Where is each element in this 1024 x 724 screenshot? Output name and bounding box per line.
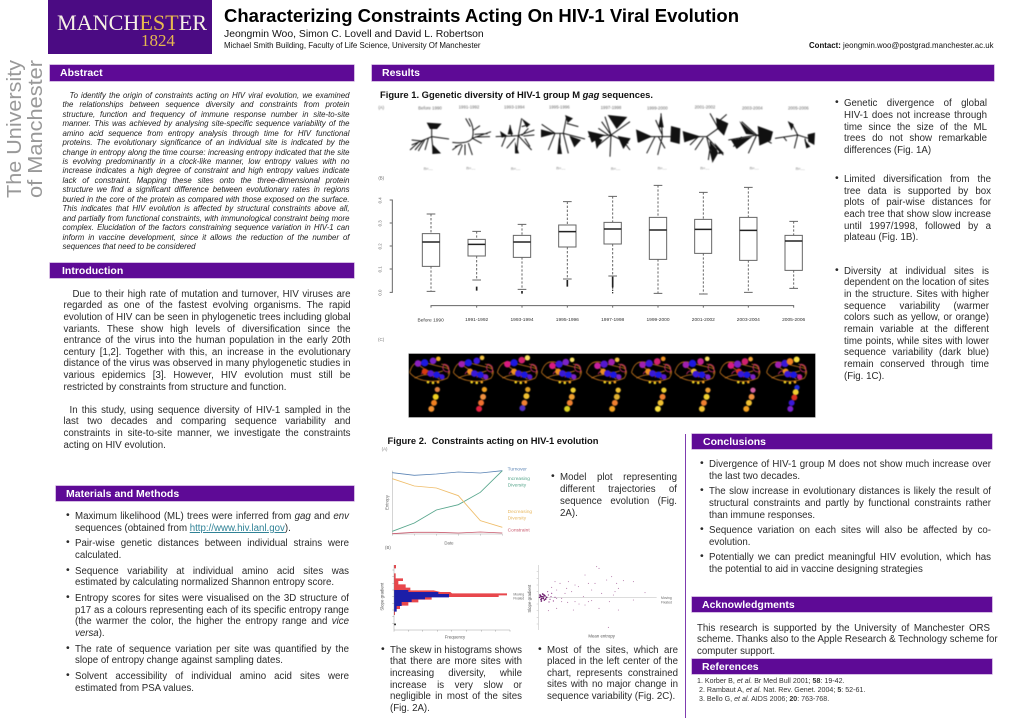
- figure 2B bullet: histograms: [381, 643, 522, 714]
- scatter plot: [527, 565, 672, 638]
- abstract text: change in entropy along the time course: increasing entropy indicated that the site: [62, 148, 350, 156]
- side wordmark: The University of Manchester: [4, 60, 44, 198]
- figure 1B: box plots of pair-wise distances: 1997-1998: [601, 317, 625, 323]
- tree 1: [410, 123, 449, 154]
- figure 1A: phylogenetic trees by period: 2003-2004: [742, 105, 763, 110]
- text: •: [700, 523, 704, 535]
- figure 1A: phylogenetic trees by period: n=…: [511, 166, 520, 171]
- acknowledgments text: This research is supported by the University of Manchester ORS: [697, 622, 990, 634]
- heading: References: [692, 659, 992, 674]
- heading: Abstract: Abstract: [60, 67, 103, 79]
- figure 2A: model plot of entropy trajectories: Turnover: [508, 466, 527, 472]
- tree 7: [683, 113, 728, 163]
- abstract text: manner. This was achieved by analysing site-specific sequence variability of the: [62, 119, 350, 128]
- abstract text: proteins. The evolutionary significance of an individual site is indicated by the: [62, 138, 350, 147]
- figure 1 bullets: Diversity at individual sites is: [844, 266, 989, 277]
- materials and methods bullets: Solvent accessibility of individual amino acid sites were: [75, 671, 349, 682]
- materials and methods bullets: p17 as a colours representing each of its specific entropy range: [75, 605, 349, 616]
- figure 1A: phylogenetic trees by period: n=…: [424, 166, 433, 171]
- figure 2A bullet: [551, 470, 677, 519]
- materials and methods bullets: Entropy scores for sites were visualised on the 3D structure of: [75, 593, 349, 604]
- structure 8: [720, 357, 760, 412]
- introduction text: restricted by constraints from structure and function.: [64, 382, 286, 393]
- materials and methods bullets: estimated by calculating normalized Shannon entropy score.: [75, 577, 334, 588]
- scatter plot: Moving: [661, 596, 672, 600]
- figure 1A: phylogenetic trees by period: n=…: [466, 165, 476, 170]
- figure 1B: box plots of pair-wise distances: (B): [378, 175, 385, 180]
- figure 1A: phylogenetic trees by period: n=…: [556, 165, 566, 170]
- structure 4: [541, 357, 581, 412]
- abstract text: [62, 91, 350, 251]
- figure 1A: phylogenetic trees by period: n=…: [796, 166, 805, 171]
- text: •: [66, 536, 70, 548]
- figure 1 bullets: remain conserved through time: [844, 359, 989, 370]
- line: constraint: [392, 532, 502, 534]
- structure 9: [767, 356, 807, 412]
- figure 1B: box plots of pair-wise distances: 0.1: [378, 266, 383, 272]
- figure 1 bullets: until 1997/1998, followed by a: [844, 221, 991, 232]
- introduction text: entrance of the virus into the human population in the early 20th: [64, 335, 350, 346]
- figure 1A: phylogenetic trees by period: n=…: [700, 166, 710, 171]
- logo: University of Manchester 1824: 1824: [141, 31, 176, 50]
- figure 1A: phylogenetic trees by period: (A): [378, 105, 385, 110]
- abstract text: increase indicates a high degree of constraint and high entropy values indicate: [62, 166, 350, 175]
- acknowledgments text: computer support.: [697, 646, 775, 657]
- authors: Jeongmin Woo, Simon C. Lovell and David L. Robertson: [224, 29, 484, 40]
- heading: Results: Results: [382, 67, 420, 79]
- figure 1 bullets: colors such as yellow, or orange): [844, 312, 989, 323]
- figure 2A bullet: different trajectories of: [560, 484, 677, 495]
- figure 1A: phylogenetic trees by period: 1995-1996: [549, 105, 570, 110]
- heading: Conclusions: [692, 434, 992, 449]
- conclusions bullets: the potential to aid in vaccine designing strategies: [709, 564, 923, 575]
- figure 1A: phylogenetic trees by period: Before 1990: [418, 105, 442, 110]
- materials and methods bullets: The rate of sequence variation per site was quantified by the: [75, 644, 349, 654]
- figure 2C bullet: scatter: chart, represents constrained: [547, 668, 678, 679]
- introduction text: distance of the virus was observed in many phylogenetic studies in: [64, 358, 350, 369]
- figure 1A: phylogenetic trees by period: 1993-1994: [504, 105, 525, 110]
- structure 7: [675, 356, 715, 412]
- text: •: [700, 550, 704, 562]
- figure 1 bullets: (Fig. 1C).: [844, 371, 884, 382]
- axes: [390, 200, 794, 308]
- line: increasing diversity: [392, 471, 502, 531]
- figure 1B: box plots of pair-wise distances: 0.2: [378, 243, 383, 249]
- heading: Materials and Methods: [56, 486, 354, 501]
- heading: References: References: [702, 661, 759, 673]
- materials and methods bullets: Pair-wise genetic distances between individual strains were: [75, 538, 349, 549]
- figure 1 caption: Figure 1. Ggenetic diversity of HIV-1 group M gag sequences.: [380, 88, 653, 100]
- text: •: [835, 264, 839, 276]
- tree 2: [452, 118, 491, 155]
- figure 2A: model plot of entropy trajectories: Diversity: [508, 482, 527, 488]
- figure 1B: box plots of pair-wise distances: 0.3: [378, 220, 383, 226]
- logo: University of Manchester 1824: MANCHESTER: [57, 10, 207, 35]
- figure 2B: histogram and scatter of slope gradient: (B): [385, 545, 391, 550]
- figure 2A bullet: Model plot representing: [560, 472, 677, 483]
- conclusions bullets: the last two decades.: [709, 471, 800, 482]
- figure 1 bullets: time since the size of the ML: [844, 122, 987, 132]
- text: •: [700, 457, 704, 469]
- figure 1 bullets: in the structure. Sites with higher: [844, 289, 989, 300]
- abstract text: structure, function and frequency of immune response number in site-to-site: [62, 110, 350, 119]
- conclusions bullets: Potentially we can predict meaningful HIV evolution, which has: [709, 552, 991, 563]
- materials and methods bullets: Maximum likelihood (ML) trees were inferred from gag and env: [75, 511, 349, 522]
- tree 5: [588, 115, 631, 157]
- figure 2B: histogram and scatter of slope gradient: [380, 545, 672, 640]
- title: Characterizing Constraints Acting On HIV-1 Viral Evolution: [224, 5, 739, 26]
- heading: Acknowledgments: Acknowledgments: [702, 599, 795, 611]
- materials and methods bullets: [66, 509, 350, 694]
- figure 2B bullet: histograms: increasing diversity, while: [390, 668, 522, 679]
- conclusions bullets: evolution.: [709, 537, 750, 548]
- figure 1B: box plots of pair-wise distances: 1991-1992: [465, 317, 489, 323]
- introduction text: regarded as one of the fastest evolving organisms. The rapid: [64, 300, 350, 311]
- introduction text: various epidemics [3]. However, HIV evolution must still be: [64, 370, 350, 381]
- tree 9: [775, 121, 815, 148]
- figure 2A: model plot of entropy trajectories: Decreasing: [508, 509, 532, 515]
- abstract text: is evolving predominantly in a clock-like manner, low entropy values with no: [62, 157, 350, 166]
- histogram: Frequency: [445, 635, 466, 640]
- figure 1 bullets: each tree that show slow increase: [844, 209, 991, 220]
- figure 1 bullets: Limited diversification from the: [844, 174, 991, 185]
- figure 1B: box plots of pair-wise distances: Before 1990: [418, 318, 444, 324]
- figure 2C bullet: scatter: Most of the sites, which are: [547, 644, 678, 656]
- text: •: [66, 564, 70, 576]
- heading: Introduction: Introduction: [62, 265, 123, 277]
- figure 2A: model plot of entropy trajectories: [382, 446, 532, 545]
- affiliation: Michael Smith Building, Faculty of Life Science, University Of Manchester: [224, 41, 481, 50]
- figure 2B bullet: histograms: increase is very slow or: [390, 680, 522, 691]
- figure 1B: box plots of pair-wise distances: 2001-2002: [692, 317, 715, 323]
- materials and methods bullets: versa).: [75, 628, 105, 639]
- text: •: [700, 484, 704, 496]
- figure 1 bullets: trees do not show remarkable: [844, 133, 987, 144]
- figure 1C label: (C): [378, 337, 384, 342]
- figure 1A: phylogenetic trees by period: 1991-1992: [459, 105, 480, 110]
- introduction text: In this study, using sequence diversity of HIV-1 sampled in the: [70, 405, 350, 416]
- outliers: [477, 277, 613, 294]
- conclusions bullets: than immune responses.: [709, 510, 815, 521]
- materials and methods bullets: estimated from PSA values.: [75, 683, 194, 694]
- medians: [422, 229, 802, 244]
- text: •: [538, 642, 542, 654]
- heading: Results: [372, 65, 994, 81]
- tree 3: [496, 118, 534, 153]
- figure 1A: phylogenetic trees by period: n=…: [658, 166, 667, 171]
- heading: Conclusions: Conclusions: [703, 436, 766, 448]
- whisker caps: [427, 185, 798, 294]
- heading: Introduction: [50, 263, 354, 278]
- structure 6: [632, 356, 672, 412]
- figure 2A bullet: sequence evolution (Fig.: [560, 496, 677, 507]
- introduction text: constraints in site-to-site manner, we investigate the constraints: [64, 428, 350, 439]
- references list: 2. Rambaut A, et al. Nat. Rev. Genet. 2004; 5: 52-61.: [699, 686, 865, 694]
- text: •: [835, 172, 839, 184]
- introduction text: evolution of HIV can be seen in phylogenetic trees including global: [64, 312, 350, 323]
- materials and methods bullets: Sequence variability at individual amino acid sites was: [75, 566, 349, 576]
- figure 2B bullet: histograms: (Fig. 2A).: [390, 703, 430, 714]
- figure 1B: box plots of pair-wise distances: 2005-2006: [782, 317, 806, 323]
- tree 8: [728, 121, 773, 153]
- references list: [697, 677, 865, 703]
- figure 1 bullets: dependent on the location of sites: [844, 277, 989, 288]
- text: •: [551, 470, 555, 482]
- figure 1B: box plots of pair-wise distances: 0.4: [378, 197, 383, 203]
- line: turnover: [392, 471, 502, 475]
- abstract text: structure we find a significant difference between evolutionary rates in regions: [62, 185, 350, 194]
- figure 2B bullet: histograms: that there are more sites with: [390, 656, 522, 667]
- figure 1 bullets: remain variable at the different: [844, 324, 989, 335]
- figure 1B: box plots of pair-wise distances: [378, 175, 806, 324]
- boxes: [422, 217, 802, 270]
- figure 2A: model plot of entropy trajectories: Constraint: [508, 527, 530, 533]
- abstract text: To identify the origin of constraints acting on HIV viral evolution, we examined: [70, 91, 350, 100]
- introduction text: last two decades and comparing sequence variability and: [64, 416, 350, 427]
- figure 1B: box plots of pair-wise distances: 1995-1996: [556, 317, 579, 323]
- figure 2C bullet: scatter: placed in the left center of the: [547, 656, 678, 667]
- figure 2 caption: Figure 2. Constraints acting on HIV-1 evolution: [388, 434, 598, 446]
- figure 1B: box plots of pair-wise distances: 0.0: [378, 289, 383, 296]
- figure 1 bullets: Genetic divergence of global: [844, 98, 987, 109]
- figure 1 bullets: plateau (Fig. 1B).: [844, 232, 918, 243]
- figure 2A: model plot of entropy trajectories: Date: [444, 540, 454, 545]
- references list: 3. Bello G, et al. AIDS 2006; 20: 763-768.: [699, 695, 829, 703]
- side wordmark: The University of Manchester: The University: [4, 60, 26, 198]
- figure 1A: phylogenetic trees by period: [378, 104, 816, 171]
- figure 2C bullet: scatter: [538, 642, 678, 702]
- abstract text: amino acid sequence from entropy analysis through time for HIV functional: [62, 129, 350, 138]
- figure 2C bullet: scatter: sequence variability (Fig. 2C).: [547, 691, 675, 702]
- text: •: [835, 96, 839, 108]
- tree 4: [541, 115, 585, 154]
- figure 1 bullets: [835, 96, 991, 382]
- abstract text: the relationships between sequence diversity and constraints from protein: [62, 100, 350, 109]
- figure 1A: phylogenetic trees by period: 2005-2006: [788, 105, 809, 110]
- figure 1A: phylogenetic trees by period: n=…: [611, 166, 620, 171]
- whiskers: [431, 185, 794, 294]
- logo: University of Manchester 1824: [48, 0, 212, 54]
- histogram: [380, 565, 524, 640]
- figure 2A: model plot of entropy trajectories: Diversity: [508, 515, 527, 521]
- figure 1 bullets: sequence variability (warmer: [844, 301, 989, 312]
- abstract text: This indicates that HIV evolution is affected by structural constraints above all,: [62, 204, 350, 213]
- histogram: Fixated: [513, 597, 524, 601]
- figure 1B: box plots of pair-wise distances: 1999-2000: [646, 317, 670, 323]
- structure 3: [497, 355, 537, 411]
- conclusions bullets: The slow increase in evolutionary distances is likely the result of: [709, 486, 991, 497]
- figure 1A: phylogenetic trees by period: 2001-2002: [695, 105, 716, 110]
- divider line: [684, 434, 686, 718]
- structure 2: [453, 355, 493, 412]
- abstract text: complex. Elucidation of the factors constraining sequence variation in HIV-1 can: [62, 223, 350, 232]
- abstract text: sequences that need to be considered: [62, 242, 196, 251]
- figure 1 bullets: plots of pair-wise distances for: [844, 197, 991, 208]
- figure 1B: box plots of pair-wise distances: 2003-2004: [737, 317, 760, 323]
- figure 1B: box plots of pair-wise distances: 1993-1994: [510, 317, 534, 323]
- references list: 1. Korber B, et al. Br Med Bull 2001; 58: 19-42.: [697, 677, 844, 685]
- materials and methods bullets: calculated.: [75, 550, 121, 561]
- acknowledgments text: scheme. Thanks also to the Apple Research & Technology scheme for: [697, 634, 998, 645]
- histogram: Moving: [513, 592, 524, 596]
- figure 1 bullets: sequence variability (dark blue): [844, 347, 989, 358]
- conclusions bullets: structural constraints and partly by functional constraints rather: [709, 498, 991, 509]
- scatter plot: Slope gradient: [527, 584, 532, 613]
- text: •: [66, 509, 70, 521]
- conclusions bullets: Sequence variation on each sites will also be affected by co-: [709, 525, 991, 536]
- text: •: [66, 669, 70, 681]
- scatter plot: Fixated: [661, 600, 672, 604]
- conclusions bullets: Divergence of HIV-1 group M does not show much increase over: [709, 459, 991, 470]
- conclusions bullets: [700, 457, 991, 575]
- abstract text: buried in the core of the protein as compared with those exposed on the surface.: [62, 195, 350, 204]
- figure 2C bullet: scatter: sites with no major change in: [547, 679, 678, 690]
- introduction text: acting on HIV evolution.: [64, 440, 166, 451]
- histogram: Slope gradient: [380, 582, 385, 611]
- abstract text: lack of constraint. Mapping these sites onto the three-dimensional protein: [62, 176, 350, 185]
- figure 1A: phylogenetic trees by period: 1999-2000: [647, 105, 668, 110]
- figure 1 bullets: differences (Fig. 1A): [844, 145, 931, 156]
- heading: Acknowledgments: [692, 597, 992, 612]
- acknowledgments text: [697, 622, 998, 657]
- heading: Abstract: [50, 65, 354, 81]
- figure 1 bullets: tree data is supported by box: [844, 186, 991, 197]
- figure 1 bullets: time points, while sites with lower: [844, 336, 989, 347]
- figure 2A: model plot of entropy trajectories: (A): [382, 446, 388, 451]
- materials and methods bullets: (the warmer the color, the higher the entropy range and vice: [75, 616, 349, 627]
- materials and methods bullets: slope of entropy change against sampling dates.: [75, 655, 283, 666]
- heading: Materials and Methods: Materials and Methods: [66, 488, 179, 500]
- structure 5: [586, 357, 626, 412]
- figure 1A: phylogenetic trees by period: 1997-1998: [601, 105, 622, 110]
- text: •: [381, 643, 385, 655]
- figure 2B bullet: histograms: The skew in histograms shows: [390, 645, 522, 656]
- figure 1A: phylogenetic trees by period: n=…: [750, 165, 759, 170]
- abstract text: and partially from functional constraints, with immunological constraint being more: [62, 214, 350, 223]
- line: decreasing diversity: [392, 479, 502, 527]
- figure 1 bullets: HIV-1 does not increase through: [844, 110, 987, 121]
- introduction text: Due to their high rate of mutation and turnover, HIV viruses are: [72, 289, 350, 300]
- figure 2B bullet: histograms: negligible in most of the sites: [390, 691, 522, 702]
- figure 1C: p17 structures coloured by entropy: [409, 354, 815, 417]
- figure 2A: model plot of entropy trajectories: Entropy: [384, 494, 389, 510]
- structure 1: [410, 356, 450, 412]
- materials and methods bullets: sequences (obtained from http://www.hiv.lanl.gov).: [75, 523, 291, 534]
- contact: Contact: jeongmin.woo@postgrad.manchester.ac.uk: [809, 41, 994, 50]
- introduction text: variants. These show high levels of diversification since the: [64, 324, 350, 335]
- introduction text: [64, 289, 350, 451]
- introduction text: century [1,2]. Together with this, an increase in the evolutionary: [64, 347, 350, 358]
- figure 2A: model plot of entropy trajectories: Increasing: [508, 476, 530, 482]
- scatter plot: Mean entropy: [588, 633, 616, 638]
- figure 2A bullet: 2A).: [560, 508, 578, 519]
- tree 6: [636, 113, 680, 155]
- text: •: [66, 591, 70, 603]
- text: •: [66, 642, 70, 654]
- abstract text: inform in vaccine development, since it allows the reduction of the number of: [62, 233, 350, 242]
